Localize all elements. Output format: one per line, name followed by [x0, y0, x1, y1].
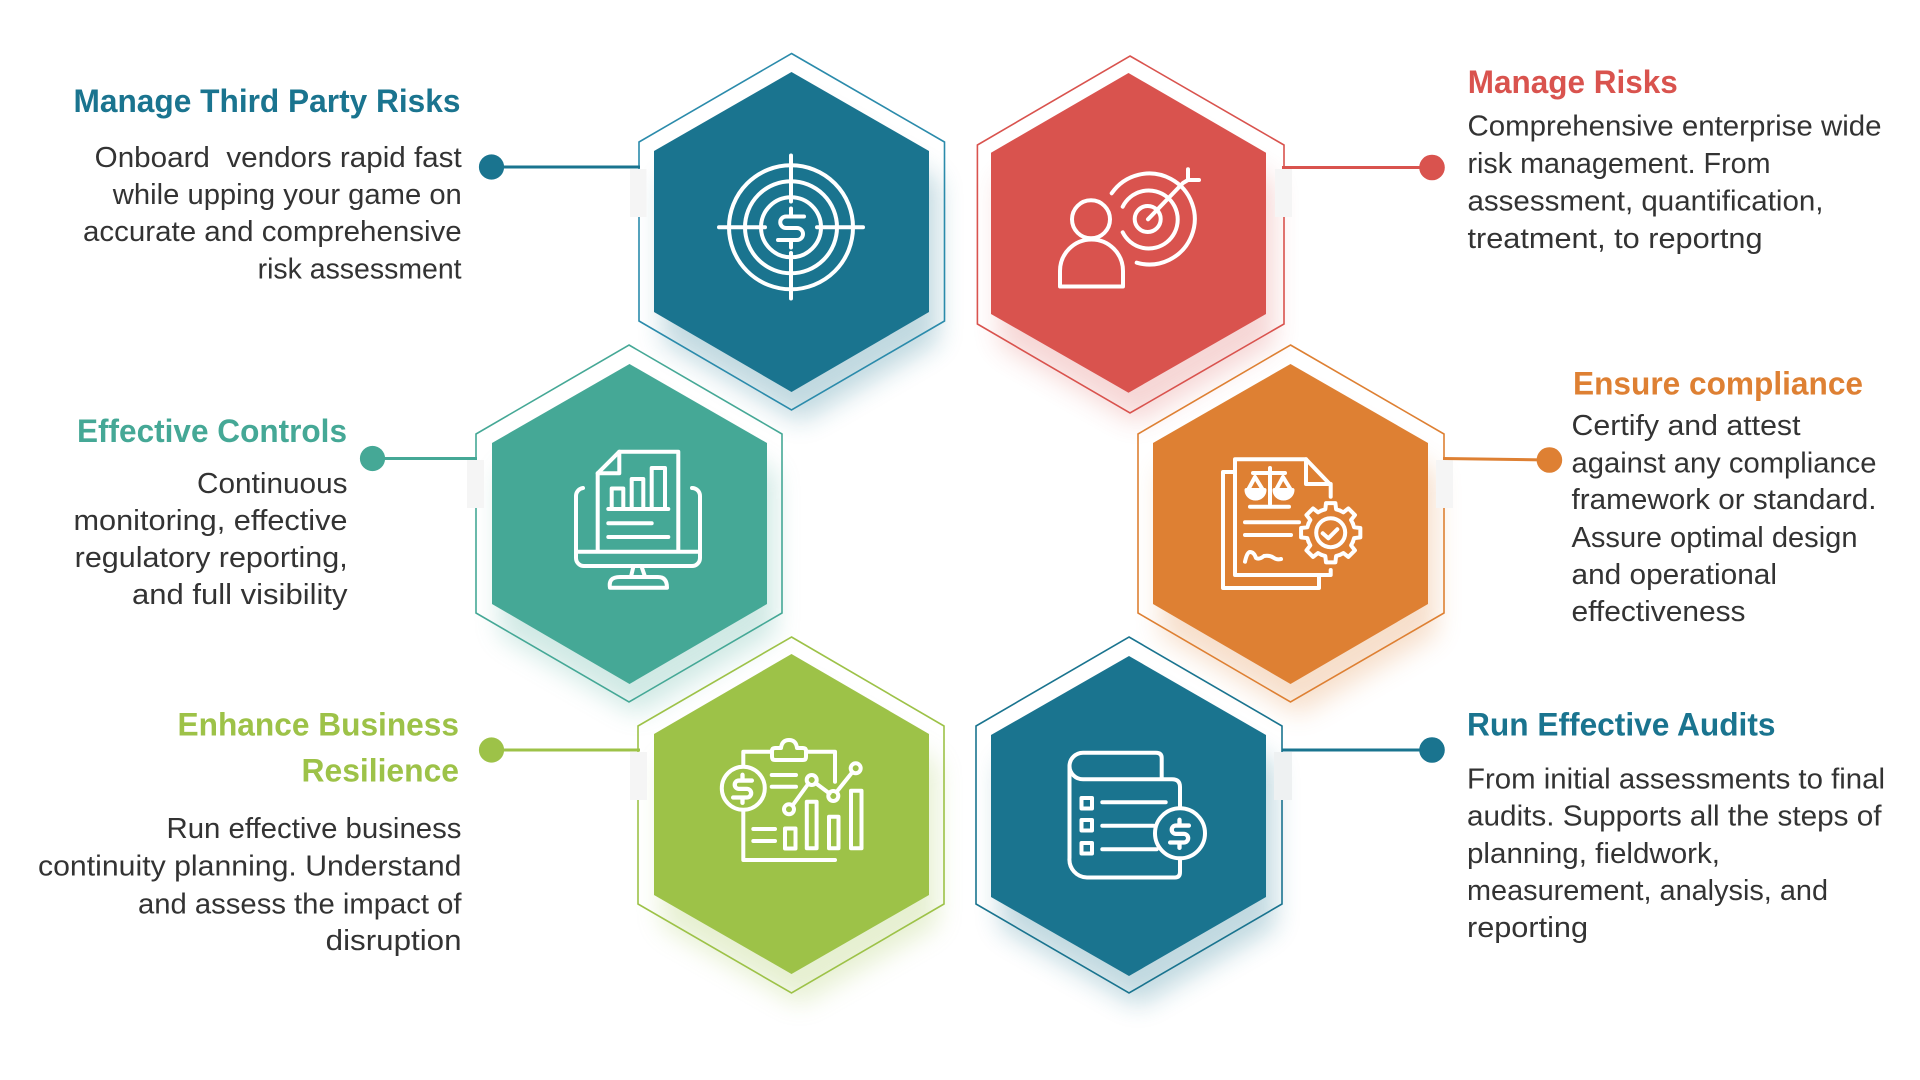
panel: Effective Controls: [74, 345, 782, 714]
body text: continuity planning. Understand: [38, 850, 461, 882]
body text: effectiveness: [1572, 596, 1746, 628]
hexagon fill: [654, 72, 929, 392]
connector line and dot: [1443, 447, 1562, 473]
heading: [178, 706, 459, 788]
body text: planning, fieldwork,: [1467, 838, 1720, 870]
heading: Effective Controls: [77, 413, 347, 449]
body text: [1467, 764, 1885, 944]
heading: Enhance Business: [178, 706, 459, 742]
hexagon outline: [476, 345, 782, 702]
body text: Comprehensive enterprise wide: [1468, 111, 1882, 143]
body text: while upping your game on: [112, 179, 462, 211]
icon: person and target: [1060, 169, 1199, 286]
heading: Run Effective Audits: [1467, 706, 1776, 742]
body text: risk management. From: [1468, 148, 1770, 180]
body text: [1572, 410, 1876, 628]
connector line and dot: [1282, 737, 1445, 763]
panel: Run Effective Audits: [976, 637, 1885, 1006]
hexagon outline: [638, 637, 944, 993]
body text: accurate and comprehensive: [83, 216, 462, 248]
body text: Run effective business: [166, 813, 462, 845]
hexagon fill: [991, 656, 1266, 976]
connector tab: [630, 752, 647, 800]
body text: monitoring, effective: [74, 505, 348, 537]
panel: Manage Risks: [977, 56, 1882, 423]
hexagon fill: [991, 73, 1266, 393]
body text: reporting: [1467, 912, 1588, 944]
body text: From initial assessments to final: [1467, 764, 1885, 796]
body text: measurement, analysis, and: [1467, 875, 1828, 907]
hexagon shadow: [663, 102, 938, 422]
connector line and dot: [1282, 155, 1445, 180]
body text: and assess the impact of: [138, 888, 462, 920]
body text: audits. Supports all the steps of: [1467, 800, 1882, 832]
hexagon shadow: [500, 394, 775, 714]
icon: monitor with report: [576, 452, 700, 588]
hexagon shadow: [1000, 686, 1275, 1006]
heading: Ensure compliance: [1573, 366, 1863, 402]
body text: assessment, quantification,: [1468, 186, 1824, 218]
body text: disruption: [326, 925, 462, 957]
connector line and dot: [479, 737, 640, 763]
hexagon shadow: [1161, 394, 1436, 714]
body text: [38, 813, 462, 957]
body text: and operational: [1572, 559, 1777, 591]
hexagon outline: [639, 54, 944, 410]
icon: compliance document with gear: [1223, 459, 1360, 588]
panel: Ensure compliance: [1138, 345, 1876, 714]
hexagon fill: [654, 654, 929, 974]
panel: Manage Third Party Risks: [74, 54, 944, 422]
icon: financial report clipboard: [722, 740, 862, 860]
hexagon fill: [1153, 364, 1428, 684]
body text: risk assessment: [258, 254, 462, 286]
body text: Continuous: [197, 468, 348, 500]
connector tab: [1436, 460, 1453, 508]
hexagon shadow: [662, 684, 937, 1004]
body text: and full visibility: [132, 579, 348, 611]
body text: regulatory reporting,: [75, 542, 348, 574]
body text: Onboard vendors rapid fast: [95, 142, 462, 174]
connector tab: [1274, 752, 1292, 800]
body text: against any compliance: [1572, 448, 1876, 480]
connector line and dot: [360, 446, 477, 471]
icon: audit checklist with dollar: [1069, 753, 1205, 878]
body text: framework or standard.: [1572, 484, 1876, 516]
hexagon outline: [976, 637, 1282, 993]
panel: Enhance Business Resilience: [38, 637, 944, 1004]
body text: Certify and attest: [1572, 410, 1801, 442]
hexagon outline: [977, 56, 1284, 413]
body text: [83, 142, 462, 286]
heading: Resilience: [302, 752, 459, 788]
body text: [1468, 111, 1882, 255]
connector tab: [1275, 169, 1292, 217]
hexagon fill: [492, 364, 767, 684]
connector tab: [467, 460, 484, 508]
icon: dollar target: [719, 156, 863, 298]
body text: Assure optimal design: [1572, 522, 1858, 554]
connector tab: [630, 169, 646, 217]
hexagon shadow: [999, 103, 1274, 423]
hexagon outline: [1138, 345, 1444, 702]
heading: Manage Third Party Risks: [74, 83, 460, 119]
body text: [74, 468, 348, 611]
connector line and dot: [479, 154, 640, 180]
body text: treatment, to reportng: [1468, 223, 1762, 255]
heading: Manage Risks: [1468, 64, 1678, 100]
